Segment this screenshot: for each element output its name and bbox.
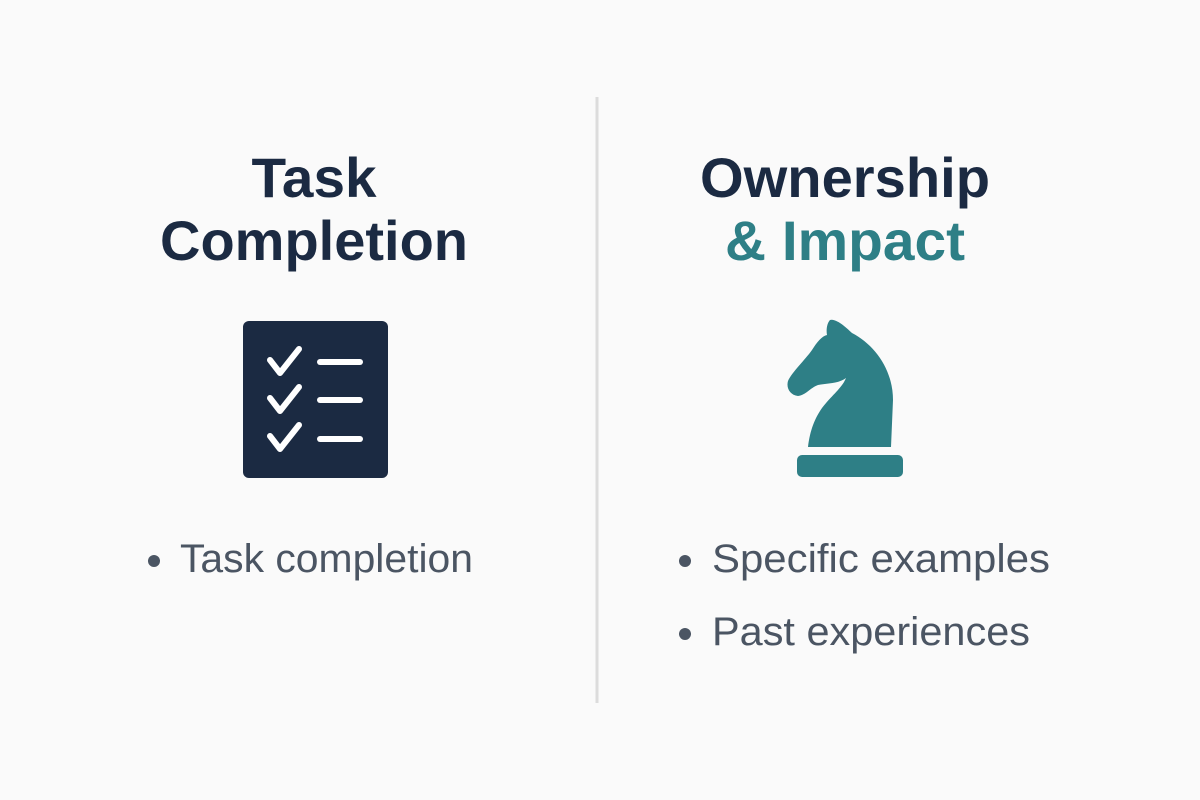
heading: task completion: Completion xyxy=(160,209,468,272)
heading: task completion: Task xyxy=(252,146,377,209)
icon: chess knight xyxy=(787,320,903,477)
panel: ownership & impact xyxy=(679,146,1050,654)
icon: checklist xyxy=(243,321,388,478)
heading: ownership & impact: Ownership xyxy=(700,146,990,209)
bullet: task completion: Task completion xyxy=(180,537,473,581)
bullets: ownership list: Specific examples xyxy=(712,537,1050,581)
bullets: ownership list: Past experiences xyxy=(712,610,1030,654)
heading: ownership & impact xyxy=(700,146,990,272)
heading: task completion xyxy=(160,146,468,272)
heading: ownership & impact: & Impact xyxy=(725,209,965,272)
bullets: ownership list xyxy=(679,537,1050,654)
panel: task completion xyxy=(148,146,473,581)
